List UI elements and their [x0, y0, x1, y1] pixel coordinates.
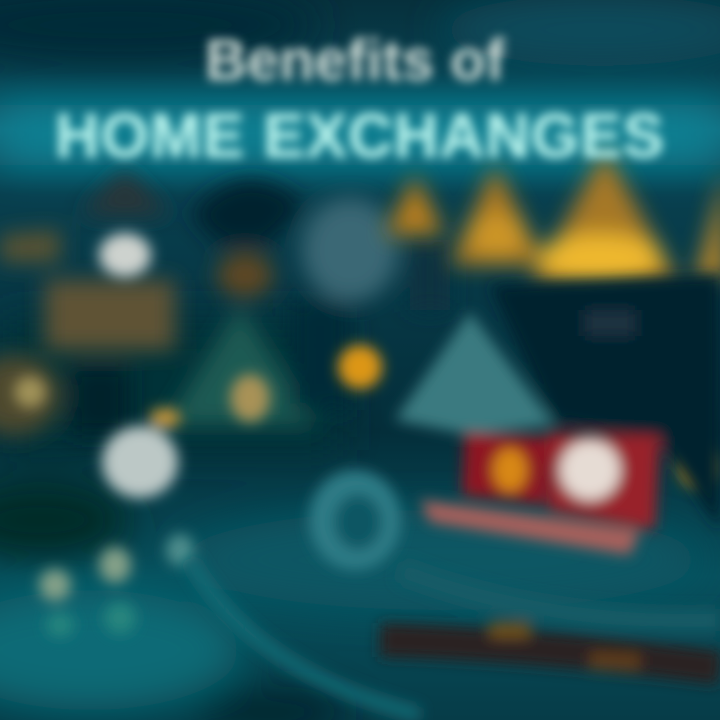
- glowing lights: [14, 233, 715, 637]
- curved path and lower foreground: [190, 560, 720, 715]
- title line 2: HOME EXCHANGES: [55, 102, 665, 171]
- title line 1: Benefits of: [205, 28, 505, 93]
- left village houses: [0, 170, 450, 435]
- large foreground house: [309, 275, 720, 570]
- golden lit rooftops: [385, 150, 720, 285]
